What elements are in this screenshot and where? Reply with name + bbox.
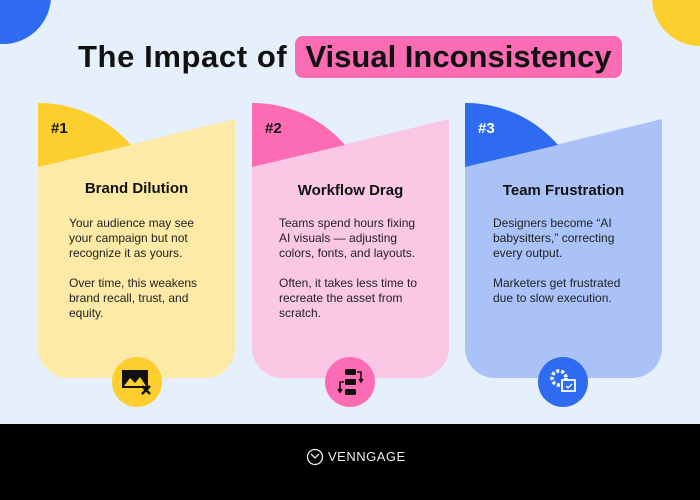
card 1 <box>38 103 235 378</box>
card 2 text <box>279 216 417 320</box>
logo: VENNGAGE <box>328 449 406 464</box>
card 1 heading: Brand Dilution <box>85 180 188 197</box>
corner circle: blue <box>0 0 51 44</box>
icon: workflow <box>325 357 375 407</box>
footer <box>0 424 700 500</box>
card 3 text: Designers become “AI babysitters,” correcting every output. <box>493 216 614 260</box>
corner circle: yellow <box>652 0 700 46</box>
card 2 number: #2 <box>265 120 282 137</box>
card 3 text: Marketers get frustrated due to slow execution. <box>493 276 620 305</box>
card 1 text <box>69 216 197 320</box>
icon: gear with window <box>538 357 588 407</box>
icon: broken image <box>112 357 162 407</box>
card 2 heading: Workflow Drag <box>298 182 403 199</box>
card 3 number: #3 <box>478 120 495 137</box>
title highlight: Visual Inconsistency <box>305 39 612 74</box>
title <box>78 36 622 78</box>
card 1 text: Your audience may see your campaign but not recognize it as yours. <box>69 216 194 260</box>
card 2 <box>252 103 449 378</box>
card 3 text <box>493 216 620 305</box>
card 3 <box>465 103 662 378</box>
card 3 heading: Team Frustration <box>503 182 624 199</box>
logo <box>306 448 406 466</box>
card 1 text: Over time, this weakens brand recall, trust, and equity. <box>69 276 197 320</box>
card 2 text: Often, it takes less time to recreate the asset from scratch. <box>279 276 417 320</box>
card 2 text: Teams spend hours fixing AI visuals — adjusting colors, fonts, and layouts. <box>279 216 415 260</box>
title: The Impact of <box>78 39 287 74</box>
card 1 number: #1 <box>51 120 68 137</box>
